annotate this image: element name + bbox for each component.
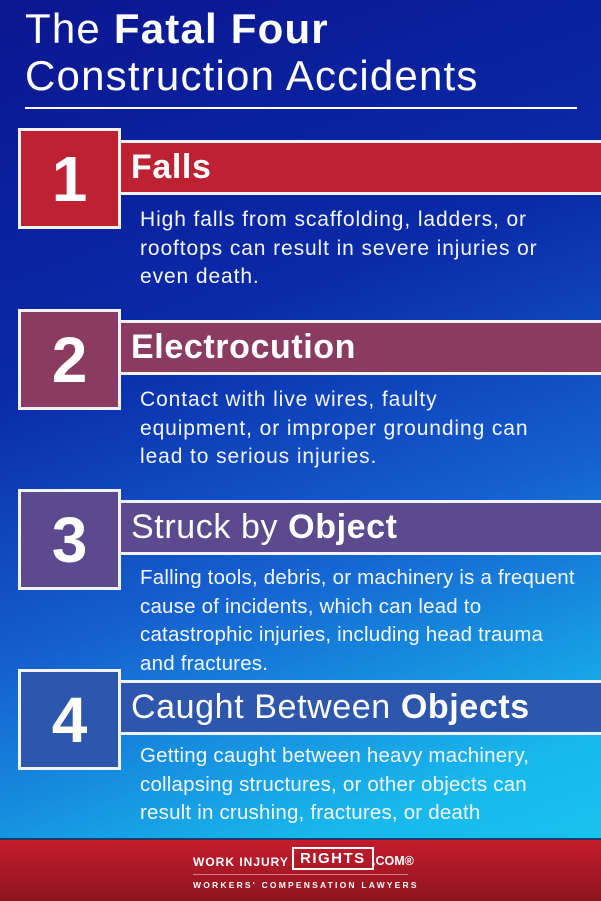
section 3: struck by object (18, 489, 601, 674)
number 3 (18, 489, 121, 590)
number 2: 2 (52, 324, 87, 396)
header bar 3 (121, 500, 601, 555)
text 4 (140, 744, 529, 824)
footer logo: WORK INJURY (193, 855, 289, 869)
section 4: caught between objects (18, 669, 601, 824)
header bar 3: Struck by Object (131, 508, 398, 546)
number 1: 1 (52, 142, 87, 214)
header bar 2: Electrocution (131, 328, 356, 366)
title: Construction Accidents (25, 52, 479, 99)
footer logo: .COM® (372, 854, 414, 868)
text 3: Falling tools, debris, or machinery is a frequent (140, 566, 575, 589)
text 2: Contact with live wires, faulty (140, 388, 438, 411)
text 2 (140, 388, 528, 468)
text 1: rooftops can result in severe injuries or (140, 236, 538, 260)
number 1 (18, 128, 121, 229)
text 4: collapsing structures, or other objects can (140, 772, 527, 796)
text 3: cause of incidents, which can lead to (140, 594, 481, 618)
text 1 (140, 208, 538, 288)
footer logo: RIGHTS (300, 850, 366, 867)
number 3: 3 (52, 504, 87, 576)
footer logo (0, 838, 601, 901)
number 4: 4 (52, 684, 87, 756)
text 2: lead to serious injuries. (140, 445, 377, 468)
text 4: result in crushing, fractures, or death (140, 801, 481, 824)
header bar 2 (121, 320, 601, 375)
title: The Fatal Four (25, 5, 329, 52)
text 3: catastrophic injuries, including head trauma (140, 623, 543, 646)
header bar 4: Caught Between Objects (131, 688, 530, 726)
text 1: High falls from scaffolding, ladders, or (140, 208, 527, 231)
number 2 (18, 309, 121, 410)
text 2: equipment, or improper grounding can (140, 416, 528, 440)
header bar 1 (121, 140, 601, 195)
number 4 (18, 669, 121, 770)
title (25, 5, 479, 99)
text 3 (140, 566, 575, 674)
header bar 1: Falls (131, 148, 211, 186)
footer logo: WORKERS' COMPENSATION LAWYERS (193, 880, 419, 890)
section 2: electrocution (18, 309, 601, 468)
section 1: falls (18, 128, 601, 288)
text 1: even death. (140, 265, 260, 288)
text 3: and fractures. (140, 652, 268, 674)
text 4: Getting caught between heavy machinery, (140, 744, 529, 767)
header bar 4 (121, 680, 601, 735)
